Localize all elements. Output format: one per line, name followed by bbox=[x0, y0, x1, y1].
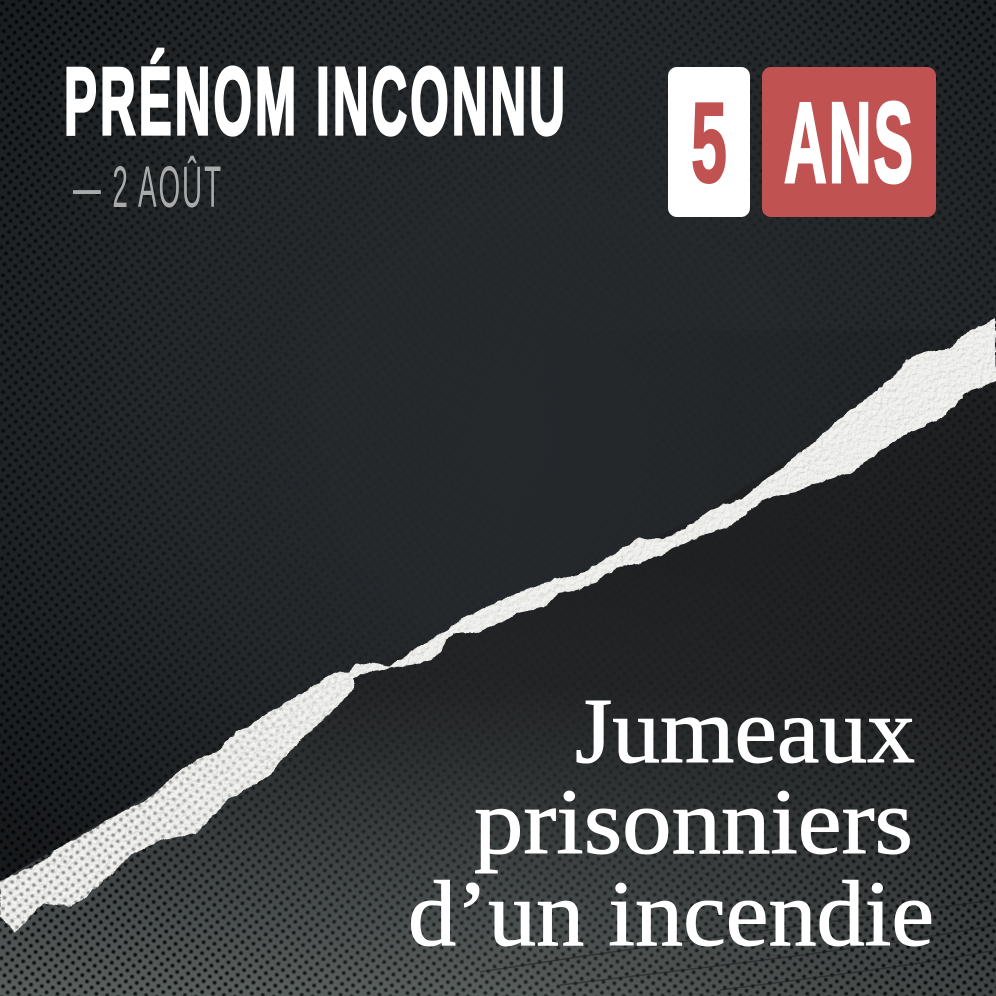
lower torn sheet bbox=[0, 319, 996, 996]
torn paper strip bbox=[0, 319, 996, 940]
badge: ans bbox=[762, 67, 936, 217]
main title: Jumeaux bbox=[575, 680, 915, 783]
badge: 5 bbox=[668, 67, 750, 217]
badge: 5: 5 bbox=[691, 80, 727, 207]
main title: d’un incendie bbox=[408, 863, 934, 966]
main title bbox=[408, 680, 934, 966]
text: — 2 AOÛT bbox=[73, 155, 223, 220]
faint streaks at the bottom bbox=[480, 900, 996, 990]
main title: prisonniers bbox=[474, 771, 913, 874]
